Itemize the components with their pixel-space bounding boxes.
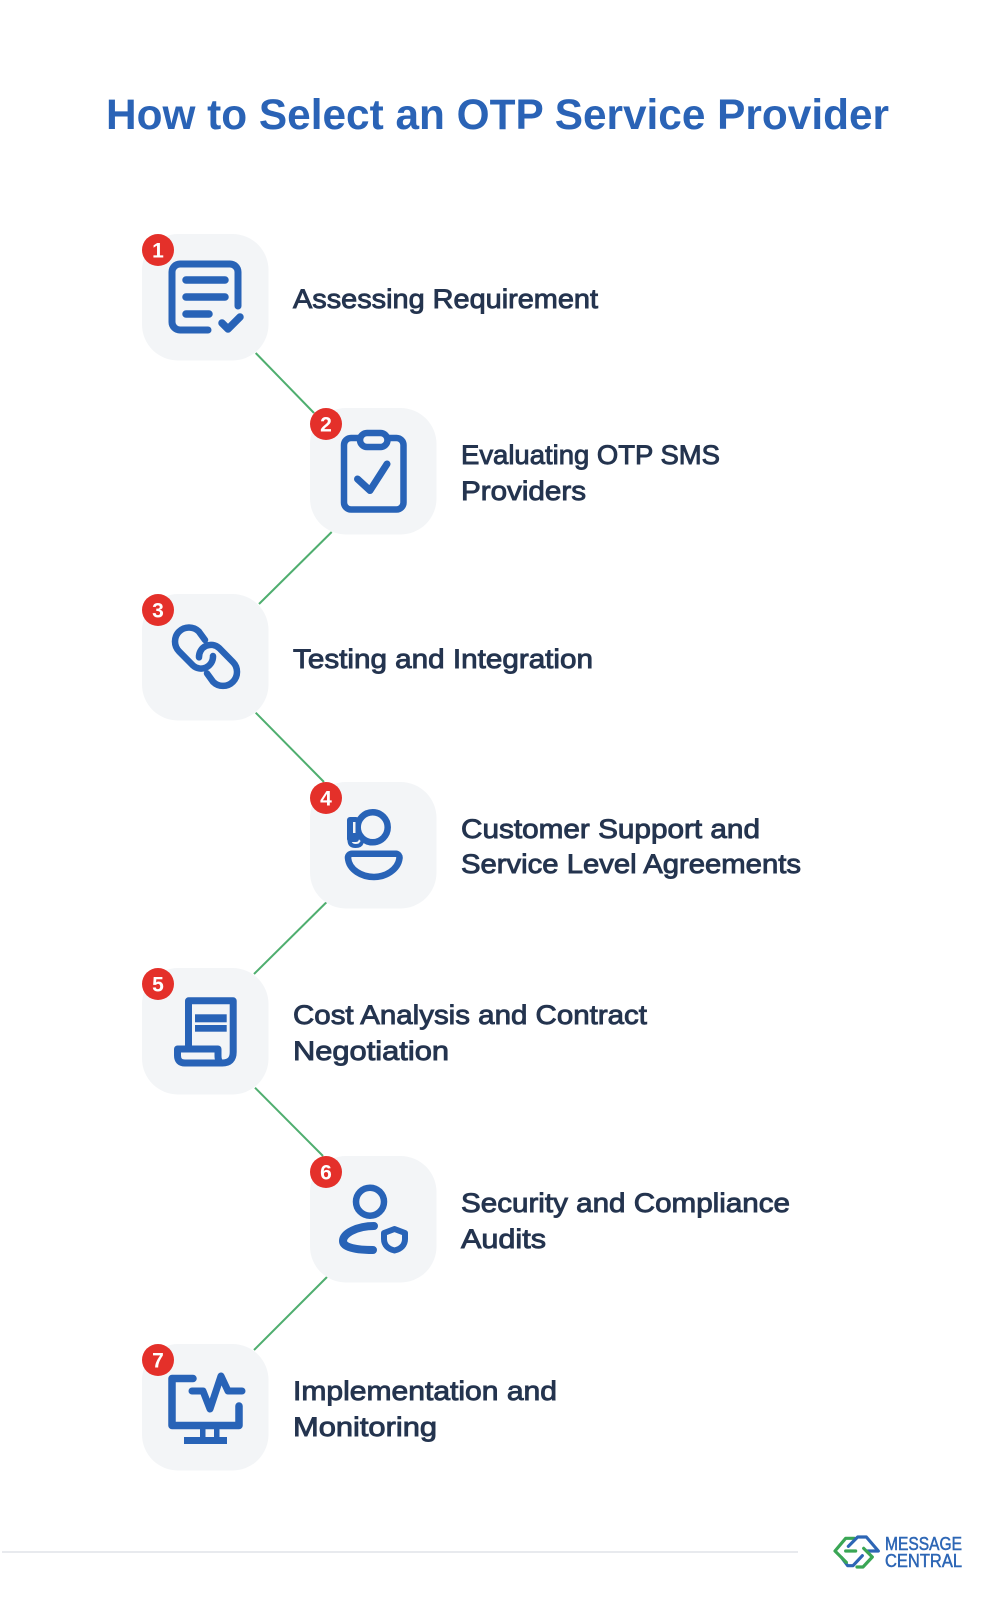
icon: scroll contract <box>178 1001 233 1063</box>
label 4: Service Level Agreements <box>461 849 801 879</box>
step 7: implementation and monitoring <box>142 1344 557 1470</box>
badge 3 <box>142 594 174 626</box>
label 7: Implementation and <box>293 1376 557 1406</box>
badge 3: 3 <box>152 600 164 622</box>
label 7 <box>293 1376 557 1442</box>
title: How to Select an OTP Service Provider <box>106 91 889 139</box>
badge 6: 6 <box>320 1162 332 1184</box>
label 5: Cost Analysis and Contract <box>293 1000 648 1030</box>
logo wordmark: MESSAGE <box>885 1534 962 1554</box>
label 2: Evaluating OTP SMS <box>461 440 720 470</box>
badge 7: 7 <box>152 1350 164 1372</box>
badge 5: 5 <box>152 974 164 996</box>
label 2 <box>461 440 720 506</box>
step 3: testing and integration <box>142 594 593 720</box>
label 4: Customer Support and <box>461 814 760 844</box>
badge 5 <box>142 968 174 1000</box>
label 3: Testing and Integration <box>293 644 593 674</box>
step 6: security and compliance <box>310 1156 790 1282</box>
label 6: Security and Compliance <box>461 1188 790 1218</box>
label 4 <box>461 814 801 879</box>
step 2: evaluating providers <box>310 408 720 534</box>
icon: monitor with pulse <box>172 1376 242 1444</box>
badge 6 <box>310 1156 342 1188</box>
footer rule <box>2 1551 798 1553</box>
badge 7 <box>142 1344 174 1376</box>
icon: user with shield <box>343 1188 405 1250</box>
badge 2: 2 <box>320 414 332 436</box>
step 4: customer support <box>310 782 801 908</box>
label 5: Negotiation <box>293 1036 449 1066</box>
label 2: Providers <box>461 476 586 506</box>
badge 2 <box>310 408 342 440</box>
logo: message central: CENTRAL <box>885 1551 962 1571</box>
logo mark <box>835 1537 878 1567</box>
label 6 <box>461 1188 790 1254</box>
badge 4: 4 <box>320 788 332 810</box>
connector lines between steps <box>254 353 332 1350</box>
icon: document with check <box>172 264 240 330</box>
label 5 <box>293 1000 648 1066</box>
label 1: Assessing Requirement <box>293 284 599 314</box>
icon: clipboard with check <box>344 433 404 510</box>
badge 1: 1 <box>152 240 164 262</box>
icon: support agent <box>347 812 400 877</box>
badge 1 <box>142 234 174 266</box>
badge 4 <box>310 782 342 814</box>
icon: chain link <box>175 628 237 686</box>
label 7: Monitoring <box>293 1412 437 1442</box>
logo: message central <box>835 1534 962 1571</box>
step 1: assessing requirement <box>142 234 599 360</box>
label 6: Audits <box>461 1224 546 1254</box>
step 5: cost analysis <box>142 968 648 1094</box>
